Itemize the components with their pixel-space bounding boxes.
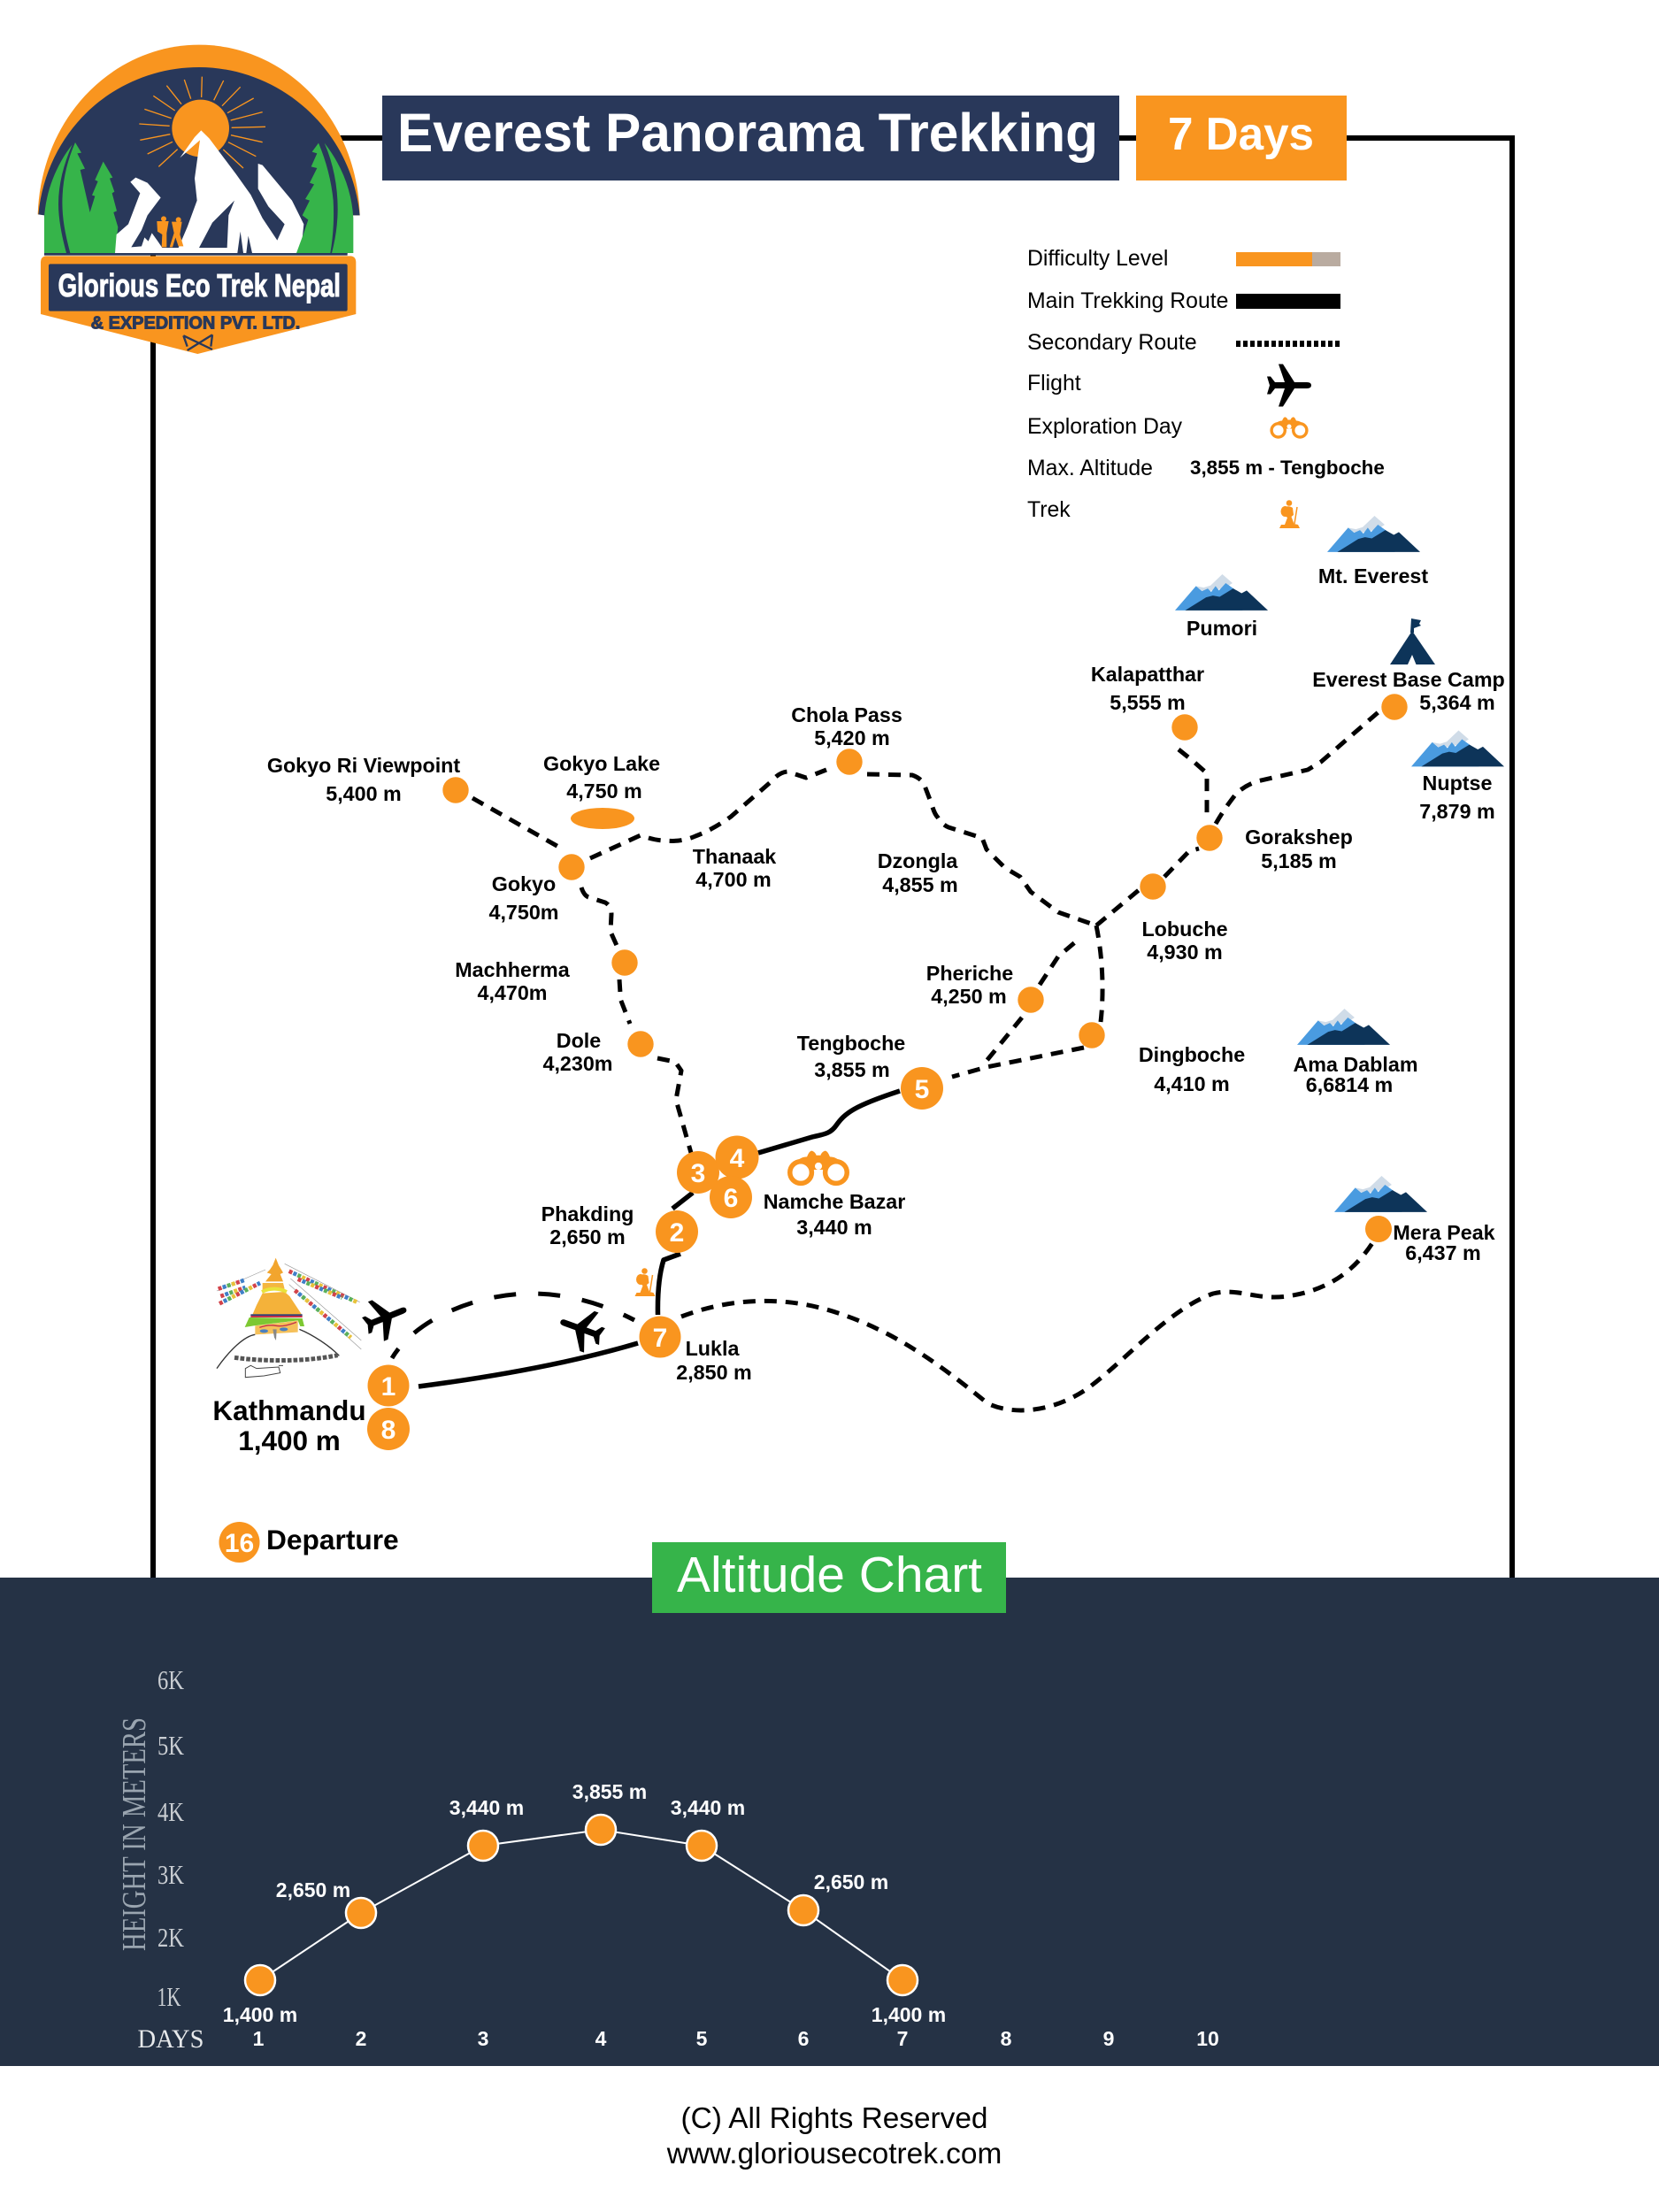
numbered day markers: 4 — [730, 1144, 745, 1173]
place labels: Machherma — [455, 958, 571, 981]
logo banner: & EXPEDITION PVT. LTD. — [91, 314, 300, 334]
place labels: Ama Dablam — [1293, 1053, 1418, 1076]
place labels: Everest Base Camp — [1312, 668, 1505, 691]
icon: Nuptse mountain — [1411, 731, 1504, 766]
legend: difficulty level — [1027, 247, 1340, 271]
x axis days: 9 — [1103, 2027, 1114, 2050]
numbered day markers — [367, 1067, 943, 1450]
panel: altitude chart background — [0, 1578, 1659, 2066]
main trekking route — [419, 1091, 900, 1386]
numbered day markers: 8 — [381, 1416, 396, 1445]
x axis days — [138, 2024, 1219, 2054]
footer — [666, 2102, 1002, 2170]
icon: Pumori mountain — [1175, 574, 1268, 611]
map stops — [442, 694, 1408, 1242]
x axis days: DAYS — [138, 2024, 204, 2054]
routes — [392, 710, 1380, 1410]
place labels: Kalapatthar — [1091, 663, 1204, 686]
icon: flight from Lukla — [553, 1302, 610, 1356]
place labels: 2,850 m — [676, 1361, 752, 1384]
x axis days: 10 — [1196, 2027, 1219, 2050]
place labels: Mera Peak — [1393, 1221, 1495, 1244]
x axis days: 6 — [798, 2027, 809, 2050]
x axis days: 1 — [253, 2027, 265, 2050]
altitude line chart: 2,650 m — [276, 1878, 350, 1901]
numbered day markers: 2 — [670, 1218, 684, 1248]
logo banner — [41, 253, 356, 354]
place labels: 6,437 m — [1405, 1241, 1481, 1264]
icon: exploration binoculars — [790, 1151, 847, 1183]
logo — [38, 45, 360, 354]
altitude line chart: 3,440 m — [671, 1796, 745, 1819]
place labels: Gokyo — [492, 872, 556, 895]
logo right trees — [296, 143, 353, 253]
legend: trek — [1027, 498, 1300, 528]
legend: trek: Trek — [1027, 498, 1071, 522]
numbered day markers: 6 — [724, 1184, 738, 1213]
place labels: Tengboche — [797, 1032, 905, 1055]
y axis ticks — [157, 1664, 184, 2012]
place labels: 5,555 m — [1110, 691, 1186, 714]
place labels: Pumori — [1187, 617, 1257, 640]
icon: Mt. Everest mountain — [1327, 516, 1420, 552]
place labels: 4,230m — [542, 1052, 613, 1075]
logo sun — [139, 77, 265, 168]
x axis days: 3 — [478, 2027, 488, 2050]
icon: Mera Peak mountain — [1334, 1176, 1427, 1212]
legend: main route: Main Trekking Route — [1027, 289, 1228, 313]
duration badge: 7 Days — [1168, 109, 1314, 160]
title banner: Everest Panorama Trekking — [397, 103, 1098, 163]
place labels: 5,364 m — [1419, 691, 1495, 714]
place labels: 6,6814 m — [1306, 1073, 1393, 1096]
duration badge — [1136, 96, 1347, 180]
place labels: Lobuche — [1141, 918, 1228, 941]
altitude line chart: 3,855 m — [572, 1780, 647, 1803]
departure note: 16 — [225, 1529, 254, 1558]
y axis ticks: 1K — [157, 1981, 181, 2012]
numbered day markers: 1 — [381, 1372, 396, 1402]
stupa prayer flags — [219, 1271, 357, 1338]
icon: Boudhanath stupa — [217, 1258, 361, 1378]
place labels: Chola Pass — [791, 703, 902, 726]
place labels: 4,410 m — [1154, 1072, 1230, 1095]
icon: flight to Lukla — [357, 1289, 414, 1346]
place labels: Phakding — [541, 1202, 634, 1225]
altitude chart heading — [652, 1542, 1006, 1613]
icon: Ama Dablam mountain — [1297, 1009, 1390, 1045]
altitude line chart — [223, 1780, 946, 2026]
place labels: Gorakshep — [1245, 826, 1353, 849]
place labels: Gokyo Lake — [543, 752, 660, 775]
y axis ticks: 6K — [157, 1664, 184, 1695]
label: Kathmandu: Kathmandu — [212, 1394, 366, 1426]
place labels: Mt. Everest — [1318, 565, 1428, 588]
legend: flight — [1027, 365, 1311, 407]
legend: difficulty level: Difficulty Level — [1027, 247, 1168, 271]
legend: flight: Flight — [1027, 372, 1081, 396]
label: Kathmandu — [212, 1394, 366, 1456]
place labels: Nuptse — [1423, 772, 1493, 795]
place labels: 4,750m — [488, 901, 559, 924]
y axis ticks: 3K — [157, 1859, 184, 1890]
place labels: 4,930 m — [1147, 941, 1223, 964]
legend: max altitude — [1027, 457, 1385, 480]
logo hikers — [157, 216, 183, 247]
place labels: Lukla — [686, 1337, 740, 1360]
place labels: Dingboche — [1139, 1043, 1245, 1066]
altitude chart heading: Altitude Chart — [677, 1547, 982, 1603]
place labels: 5,400 m — [326, 782, 402, 805]
place labels: Dole — [557, 1029, 601, 1052]
legend: main route — [1027, 289, 1340, 313]
x axis days: 8 — [1001, 2027, 1012, 2050]
legend: max altitude: 3,855 m - Tengboche — [1190, 457, 1385, 479]
legend: max altitude: Max. Altitude — [1027, 457, 1153, 480]
icon: trekker — [635, 1268, 655, 1296]
departure note — [219, 1522, 399, 1563]
logo mountains — [115, 130, 303, 253]
legend — [1027, 247, 1385, 528]
place labels: 3,855 m — [814, 1058, 890, 1081]
numbered day markers: 3 — [691, 1159, 705, 1188]
icon: base camp tent — [1390, 618, 1435, 664]
y axis title: HEIGHT IN METERS — [116, 1717, 153, 1951]
place labels: Namche Bazar — [764, 1190, 905, 1213]
place labels: 2,650 m — [549, 1225, 626, 1248]
label: Kathmandu: 1,400 m — [238, 1425, 341, 1456]
secondary routes — [472, 710, 1380, 1410]
x axis days: 2 — [356, 2027, 366, 2050]
footer: (C) All Rights Reserved — [681, 2102, 987, 2135]
y axis ticks: 2K — [157, 1922, 184, 1953]
place labels: 4,250 m — [931, 985, 1007, 1008]
place labels: 3,440 m — [796, 1216, 872, 1239]
place labels: Dzongla — [878, 849, 958, 872]
map frame — [150, 135, 1515, 1586]
altitude line chart: 1,400 m — [223, 2003, 297, 2026]
numbered day markers: 5 — [915, 1075, 929, 1104]
place labels: Thanaak — [693, 845, 776, 868]
y axis ticks: 5K — [157, 1730, 184, 1761]
place labels: 5,420 m — [814, 726, 890, 749]
place labels — [267, 565, 1505, 1384]
place labels: 4,700 m — [695, 868, 772, 891]
place labels: 4,855 m — [882, 873, 958, 896]
logo left trees — [44, 142, 118, 253]
place labels: 5,185 m — [1261, 849, 1337, 872]
altitude line chart: 2,650 m — [814, 1870, 888, 1893]
departure note: Departure — [266, 1524, 399, 1555]
place labels: Pheriche — [926, 962, 1013, 985]
logo banner: Glorious Eco Trek Nepal — [58, 267, 341, 303]
x axis days: 5 — [696, 2027, 708, 2050]
legend: secondary route: Secondary Route — [1027, 331, 1197, 355]
place labels: 4,470m — [477, 981, 548, 1004]
legend: exploration day: Exploration Day — [1027, 415, 1183, 439]
title banner — [382, 96, 1119, 180]
legend: exploration day — [1027, 415, 1307, 439]
flight route — [392, 1294, 634, 1358]
place labels: Gokyo Ri Viewpoint — [267, 754, 460, 777]
altitude line chart: 3,440 m — [449, 1796, 524, 1819]
footer: www.gloriousecotrek.com — [666, 2138, 1002, 2170]
x axis days: 7 — [897, 2027, 908, 2050]
numbered day markers: 7 — [653, 1324, 667, 1353]
place labels: 7,879 m — [1419, 800, 1495, 823]
y axis ticks: 4K — [157, 1796, 184, 1827]
x axis days: 4 — [595, 2027, 607, 2050]
place labels: 4,750 m — [566, 780, 642, 803]
altitude line chart: 1,400 m — [872, 2003, 946, 2026]
